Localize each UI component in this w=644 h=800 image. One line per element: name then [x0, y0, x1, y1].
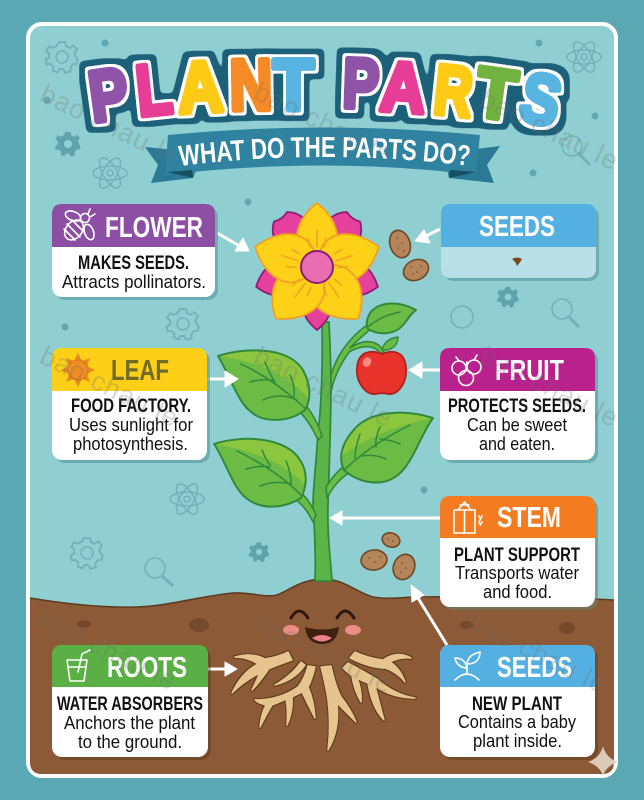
arrow: leaf — [207, 371, 238, 387]
smiling soil face — [283, 611, 361, 644]
watermarks: bao chau le — [35, 78, 184, 171]
icon: glass with straw — [67, 650, 90, 681]
watermarks: bao chau le — [33, 603, 182, 696]
icon: stem tube — [454, 502, 482, 533]
icon: bee — [61, 209, 96, 244]
leaf: upper left — [218, 350, 322, 440]
card: stem: Transports water — [455, 562, 579, 583]
subtitle ribbon — [145, 128, 500, 183]
card: stem: and food. — [483, 581, 552, 602]
watermarks: bao chau le — [249, 76, 398, 169]
title: N — [229, 44, 273, 125]
title: T — [273, 45, 314, 126]
card: leaf: FOOD FACTORY. — [71, 396, 191, 417]
card: flower — [52, 204, 218, 300]
card: stem: PLANT SUPPORT — [454, 545, 580, 566]
arrow: fruit — [409, 362, 440, 378]
watermarks: bao chau le — [249, 340, 398, 433]
card: seeds bottom: SEEDS — [497, 652, 572, 684]
card: roots: to the ground. — [78, 731, 182, 752]
card: stem: STEM — [497, 502, 561, 534]
card: leaf: Uses sunlight for — [69, 414, 193, 435]
card: roots: ROOTS — [107, 652, 187, 684]
card: stem — [440, 496, 598, 610]
seeds near flower — [386, 228, 432, 285]
apple — [357, 337, 406, 394]
card: roots — [52, 645, 211, 760]
card: fruit: FRUIT — [495, 355, 564, 387]
card: seeds bottom — [440, 645, 598, 760]
arrow: top seeds — [415, 229, 440, 243]
card: flower: FLOWER — [105, 212, 203, 244]
title: A — [378, 48, 428, 129]
leaf: small upper right — [367, 304, 416, 333]
plant — [214, 203, 433, 581]
title — [84, 44, 568, 142]
icon: sun — [61, 353, 95, 387]
card: fruit: Can be sweet — [467, 414, 567, 435]
title: A — [176, 47, 225, 129]
arrow: roots — [208, 662, 237, 676]
card: flower: Attracts pollinators. — [62, 271, 206, 292]
title: P — [84, 52, 133, 137]
title: S — [514, 57, 568, 142]
watermarks: bao chau le — [475, 83, 624, 176]
card: fruit: PROTECTS SEEDS. — [448, 396, 586, 417]
background science icons — [44, 39, 601, 586]
card: seeds bottom: Contains a baby — [458, 711, 577, 732]
card: seeds bottom: NEW PLANT — [472, 694, 562, 715]
card: leaf: LEAF — [111, 355, 169, 387]
leaf: right — [326, 413, 433, 498]
title: L — [132, 48, 176, 131]
watermarks: bao chau le — [249, 606, 398, 699]
arrow: bottom seeds — [411, 585, 447, 645]
leaf: lower left — [214, 439, 316, 522]
watermarks: bao chau le — [475, 340, 624, 433]
card: fruit — [440, 348, 598, 463]
card: flower: MAKES SEEDS. — [78, 253, 189, 274]
stem — [313, 322, 332, 581]
title: R — [430, 51, 476, 133]
title: P — [341, 44, 380, 124]
icon: sprout — [455, 652, 480, 680]
arrow: stem — [330, 511, 440, 525]
card: fruit: and eaten. — [479, 433, 555, 454]
watermarks: bao chau le — [463, 606, 612, 699]
icon: tiny seed — [512, 258, 522, 266]
card: roots: Anchors the plant — [64, 712, 195, 733]
subtitle ribbon: WHAT DO THE PARTS DO? — [178, 137, 470, 166]
seeds near stem — [360, 531, 419, 583]
title: T — [471, 53, 521, 136]
watermarks — [33, 76, 624, 699]
card: leaf — [52, 348, 210, 463]
flower — [248, 203, 386, 334]
arrow: flower — [217, 233, 249, 251]
ground soil — [30, 579, 618, 776]
arrows — [207, 229, 447, 676]
card: leaf: photosynthesis. — [73, 433, 188, 454]
branch to upper leaf and apple — [329, 323, 384, 392]
card: seeds top — [441, 204, 599, 281]
card: seeds top: SEEDS — [479, 211, 555, 243]
icon: berries — [452, 355, 481, 386]
roots — [232, 652, 415, 750]
card: seeds bottom: plant inside. — [473, 730, 562, 751]
card: roots: WATER ABSORBERS — [57, 694, 203, 715]
watermarks: bao chau le — [35, 340, 184, 433]
